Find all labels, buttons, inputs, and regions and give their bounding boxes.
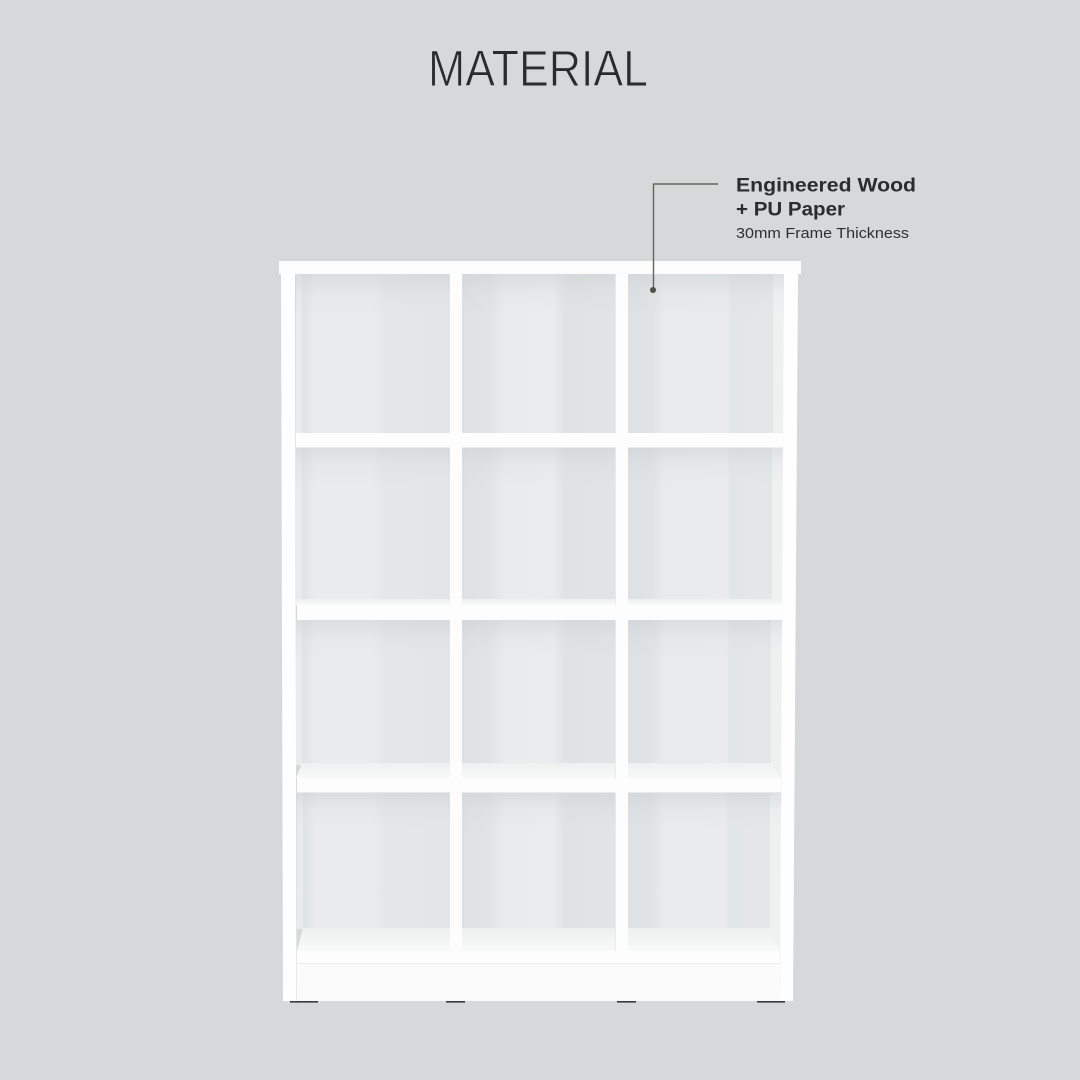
title: MATERIAL <box>428 40 648 97</box>
feet <box>290 1001 785 1003</box>
bookshelf <box>279 261 801 1003</box>
leader line and dot <box>650 184 718 293</box>
horizontal shelves <box>296 433 783 964</box>
vertical dividers <box>450 274 628 951</box>
row 1 cubbies <box>296 274 784 433</box>
side posts <box>281 274 798 1001</box>
row 4 cubbies <box>297 793 781 951</box>
top board <box>279 261 801 274</box>
callout: material <box>650 174 916 293</box>
callout text: material name <box>736 174 916 220</box>
callout text: frame thickness: 30mm Frame Thickness <box>736 225 909 242</box>
row 2 cubbies <box>296 447 783 605</box>
row 3 cubbies <box>296 620 782 778</box>
callout text: material name: Engineered Wood <box>736 174 916 196</box>
plinth <box>297 964 780 1001</box>
callout text: material name: + PU Paper <box>736 198 845 220</box>
